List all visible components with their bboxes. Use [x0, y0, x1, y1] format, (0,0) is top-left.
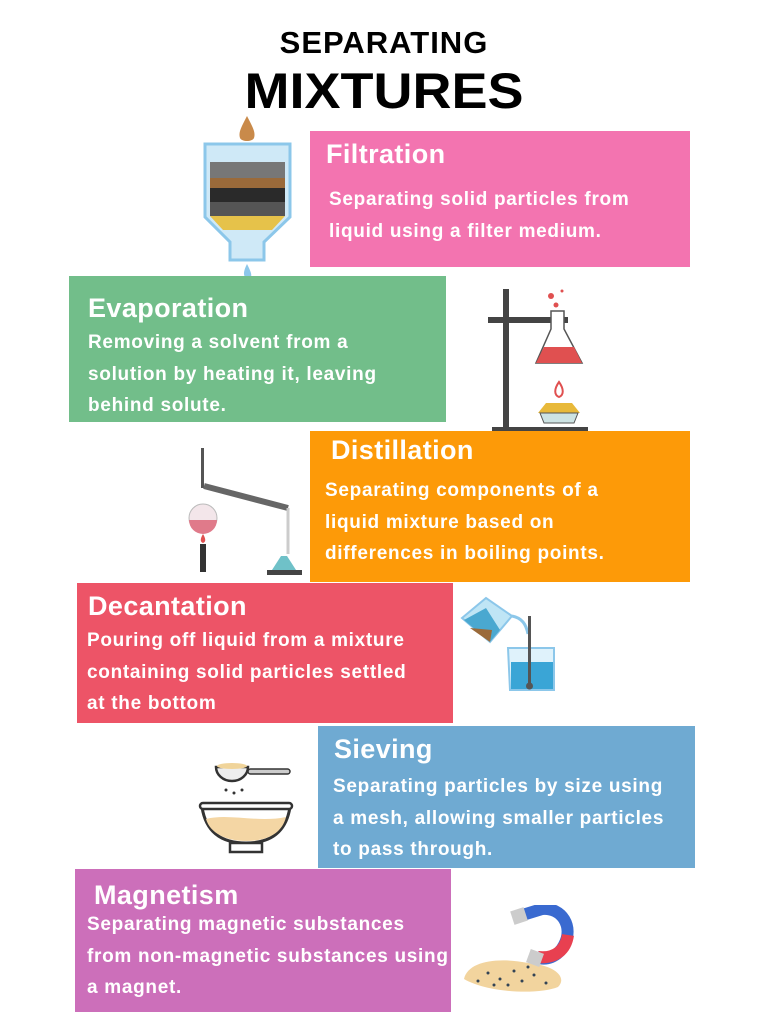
panel: evaporation: solution by heating it, leaving: [88, 364, 377, 384]
panel: decantation: Pouring off liquid from a mixture: [87, 630, 405, 651]
panel: filtration: liquid using a filter medium.: [329, 220, 602, 242]
panel: magnetism: from non-magnetic substances using: [87, 946, 449, 966]
panel: distillation: liquid mixture based on: [325, 512, 554, 532]
panel: magnetism: Separating magnetic substances: [87, 914, 405, 935]
icon: distillation apparatus: [188, 448, 302, 575]
panel: filtration: [310, 131, 690, 267]
icon: magnet: [464, 905, 574, 992]
panel: magnetism: Magnetism: [94, 880, 239, 910]
panel: sieving: [318, 726, 695, 868]
panel: evaporation: behind solute.: [88, 395, 227, 416]
icon: filter: [204, 116, 292, 276]
panel: distillation: [310, 431, 690, 582]
panel: distillation: differences in boiling points.: [325, 543, 605, 564]
icon: decantation beakers: [460, 596, 555, 691]
title: SEPARATING: [280, 25, 488, 60]
icon: sieve and bowl: [198, 763, 294, 854]
panel: filtration: Filtration: [326, 139, 446, 169]
panel: decantation: Decantation: [88, 591, 247, 621]
panel: sieving: a mesh, allowing smaller particles: [333, 808, 664, 828]
panel: evaporation: Removing a solvent from a: [88, 332, 348, 353]
panel: distillation: Separating components of a: [325, 480, 599, 501]
panel: distillation: Distillation: [331, 435, 474, 465]
title: [244, 25, 524, 119]
panel: sieving: Separating particles by size using: [333, 776, 663, 797]
panel: sieving: Sieving: [334, 734, 433, 764]
title: MIXTURES: [244, 63, 524, 119]
panel: magnetism: a magnet.: [87, 977, 182, 998]
panel: evaporation: Evaporation: [88, 293, 248, 323]
icon: evaporation stand: [488, 289, 588, 431]
panel: decantation: containing solid particles settled: [87, 662, 406, 682]
panel: decantation: [77, 583, 453, 723]
panel: sieving: to pass through.: [333, 839, 493, 860]
panel: magnetism: [75, 869, 451, 1012]
panel: decantation: at the bottom: [87, 693, 216, 714]
panel: evaporation: [69, 276, 446, 422]
panel: filtration: Separating solid particles from: [329, 189, 629, 210]
